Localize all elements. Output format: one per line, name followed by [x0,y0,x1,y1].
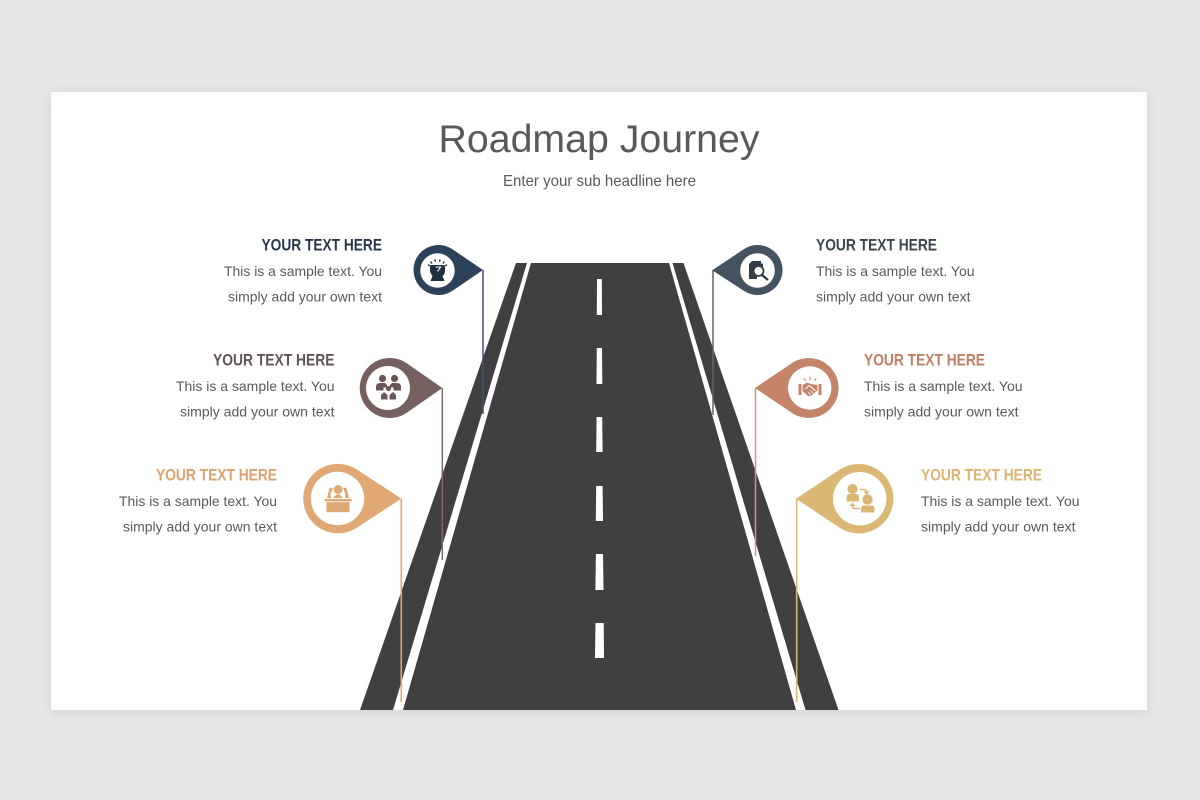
text block: step 2 left: simply add your own text [180,404,335,420]
pin: step 3 left, orange [303,464,401,702]
text block: step 3 left [119,466,277,534]
left shoulder [360,263,527,710]
pin stem [482,270,484,414]
pin: step 1 left, navy [413,245,483,414]
text block: step 2 left: YOUR TEXT HERE [213,352,334,370]
text block: step 2 right: YOUR TEXT HERE [864,352,985,370]
icon: two people exchange [846,484,874,512]
subtitle: Enter your sub headline here [503,173,696,190]
text block: step 3 right: YOUR TEXT HERE [921,466,1042,484]
pin stem [712,270,714,415]
pin body [712,245,783,295]
main carriageway [403,263,796,710]
pin body [413,245,483,295]
text block: step 1 left: simply add your own text [228,288,382,304]
text block: step 3 left: This is a sample text. You [119,493,277,509]
pin stem [796,499,798,702]
icon: team of people [376,375,401,400]
text block: step 1 right: This is a sample text. You [816,263,974,279]
text block: step 3 left: simply add your own text [123,518,277,534]
pin: step 2 left, mauve [360,358,442,560]
text block: step 2 right: simply add your own text [864,404,1019,420]
icon: raised fist [428,260,446,281]
text block: step 2 left [176,352,335,420]
icon: speaker podium [324,485,352,512]
text block: step 3 right: simply add your own text [921,518,1076,534]
text block: step 2 left: This is a sample text. You [176,378,334,394]
text block: step 1 left: This is a sample text. You [224,263,382,279]
text block: step 2 right [864,352,1022,420]
text block: step 3 right: This is a sample text. You [921,493,1080,509]
pin: step 1 right, slate [712,245,783,415]
pin body [360,358,442,418]
text block: step 2 right: This is a sample text. You [864,378,1022,394]
pin stem [400,499,402,702]
text block: step 3 left: YOUR TEXT HERE [156,466,277,484]
text block: step 1 right: simply add your own text [816,288,971,304]
icon: handshake [798,377,822,396]
pin stem [441,388,443,560]
road [360,263,838,710]
right shoulder [672,263,838,710]
text block: step 1 left: YOUR TEXT HERE [262,236,382,254]
pin body [755,358,839,418]
pin: step 3 right, gold [796,464,893,702]
title: Roadmap Journey [438,118,760,161]
icon: document with magnifier [749,261,768,280]
pin body [796,464,893,533]
pin stem [754,388,756,556]
text block: step 3 right [921,466,1080,534]
slide card [51,92,1147,710]
centre dashes [595,279,604,658]
text block: step 1 right: YOUR TEXT HERE [816,236,937,254]
pin: step 2 right, terracotta [755,358,839,556]
pin body [303,464,401,533]
text block: step 1 left [224,236,382,304]
text block: step 1 right [816,236,974,304]
